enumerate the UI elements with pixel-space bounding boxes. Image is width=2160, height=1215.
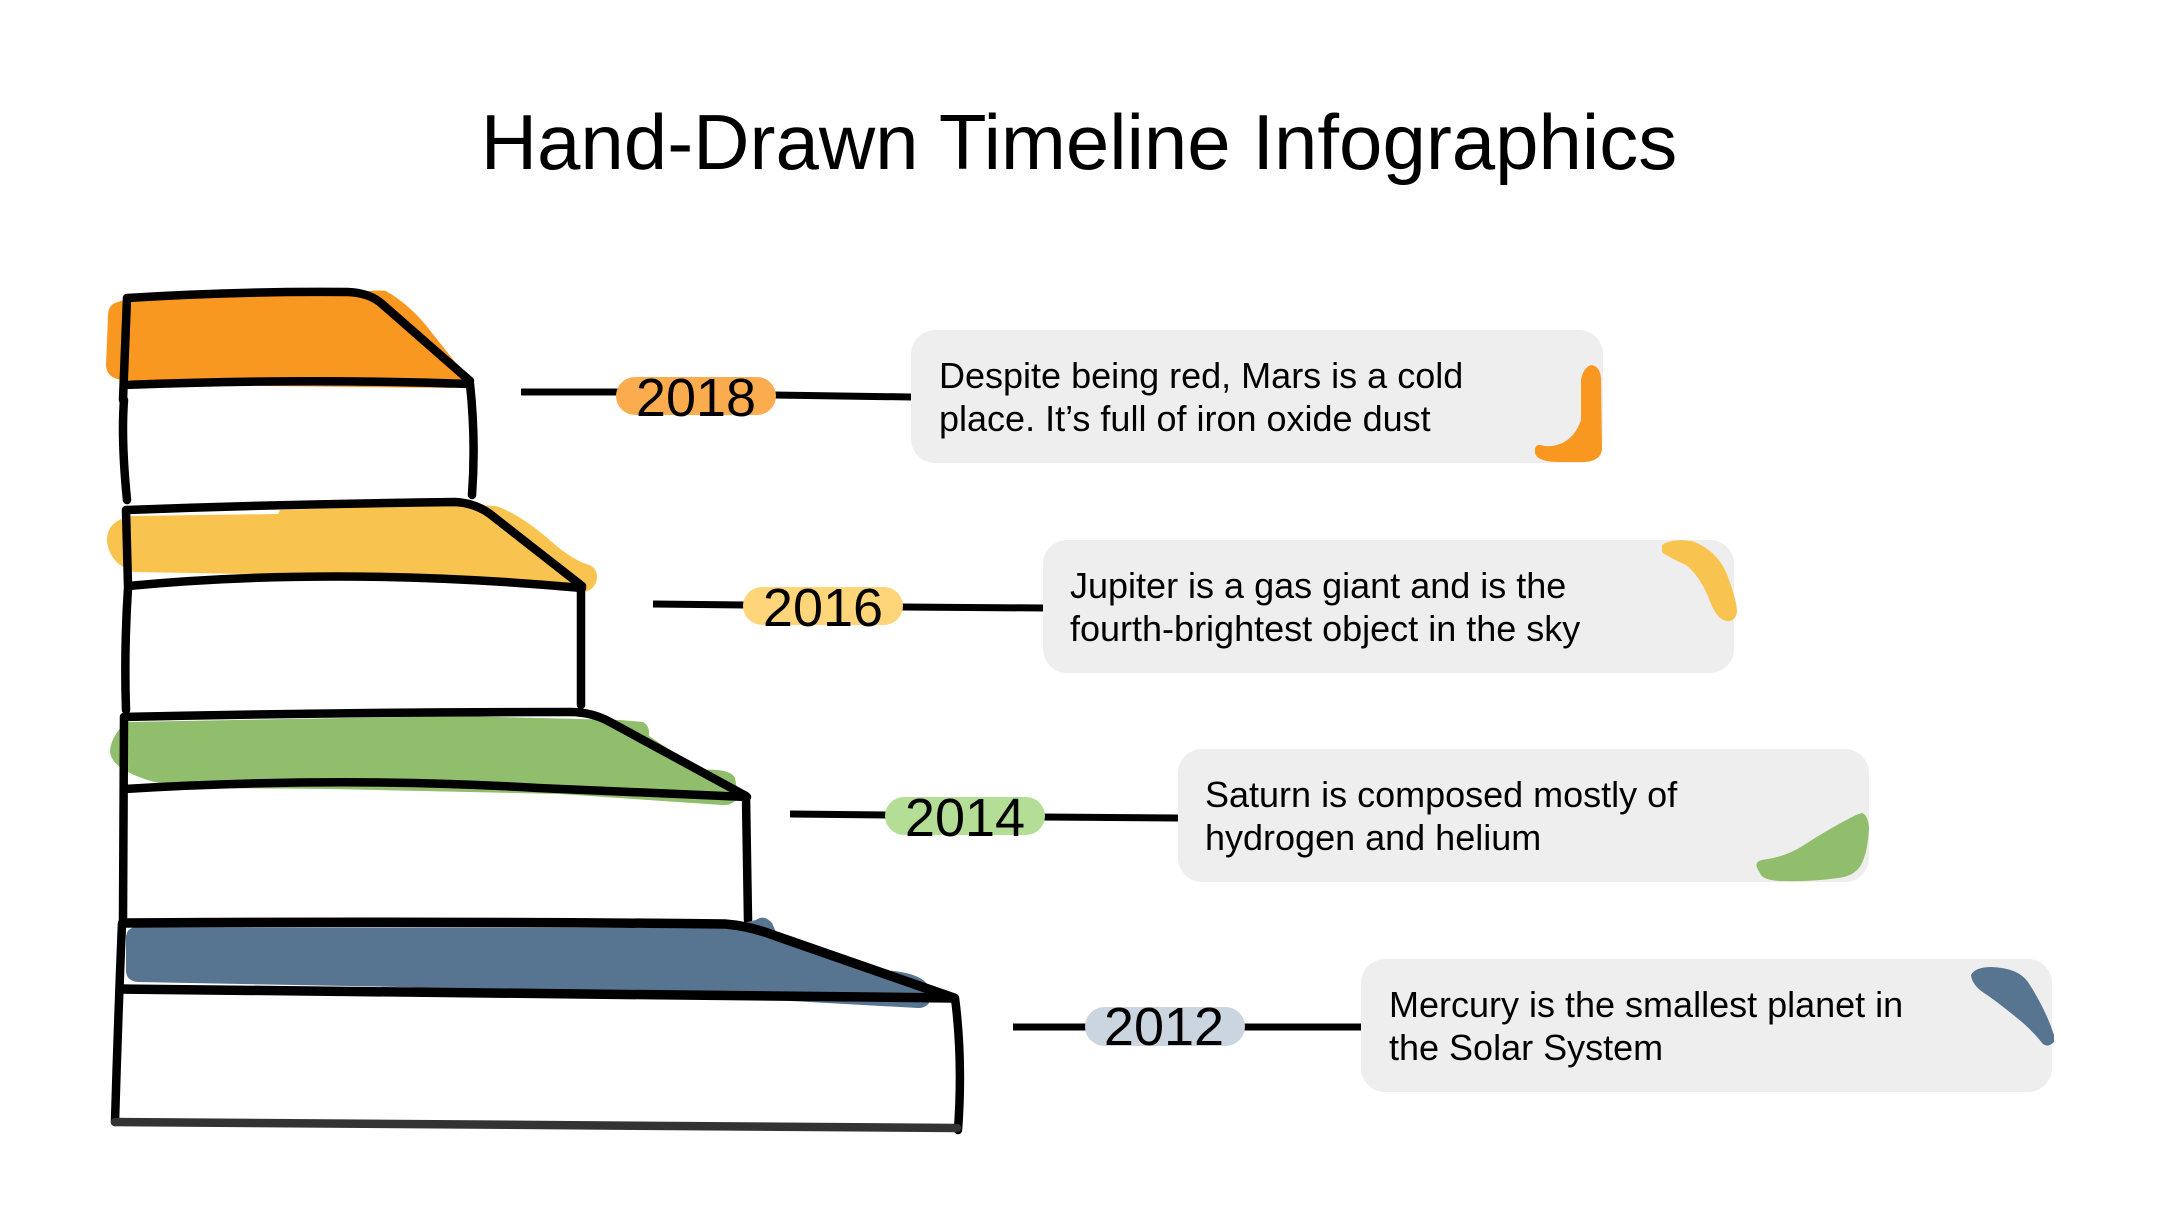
connector right (1243, 1024, 1361, 1030)
card text: Jupiter: Jupiter is a gas giant and is the (1070, 565, 1566, 606)
colour fill: 2016 yellow (107, 504, 597, 592)
year pill 2018 (616, 377, 776, 415)
connector left (521, 388, 618, 396)
card: Mercury (1361, 959, 2052, 1092)
outline: 2016 step (125, 502, 582, 710)
staircase: 2012 step (115, 918, 960, 1130)
colour fill: 2012 blue (126, 918, 931, 1008)
card text: Mercury: Mercury is the smallest planet in (1389, 984, 1903, 1025)
year label 2018: 2018 (636, 368, 756, 428)
card text: Mercury: the Solar System (1389, 1027, 1663, 1068)
card accent: blue (1971, 967, 2054, 1046)
outline: 2012 step (121, 922, 954, 998)
base line (115, 1122, 957, 1128)
timeline row 2012 (1013, 959, 2054, 1092)
connector right (902, 607, 1043, 608)
card: Saturn (1178, 749, 1869, 882)
colour fill: 2014 green (110, 716, 738, 805)
card text: Jupiter: fourth-brightest object in the sky (1070, 608, 1580, 649)
card: Jupiter (1043, 540, 1734, 673)
connector left (653, 604, 745, 605)
year label 2016: 2016 (763, 578, 883, 638)
outline: 2018 step (123, 292, 474, 500)
year label 2012: 2012 (1104, 997, 1224, 1057)
year label 2014: 2014 (905, 788, 1025, 848)
card: Mars (911, 330, 1603, 463)
connector left (1013, 1024, 1087, 1030)
staircase: 2018 step (106, 290, 474, 500)
outline: 2014 step (123, 712, 748, 920)
card text: Saturn: Saturn is composed mostly of (1205, 774, 1678, 815)
card accent: yellow (1662, 540, 1737, 621)
staircase: 2016 step (107, 502, 597, 710)
timeline row 2016 (653, 540, 1737, 673)
year pill 2016 (743, 587, 903, 625)
year pill 2012 (1085, 1007, 1245, 1046)
card accent: orange (1535, 365, 1602, 462)
connector left (790, 814, 887, 815)
card accent: green (1756, 813, 1869, 881)
connector right (1043, 817, 1178, 818)
staircase: 2014 step (110, 712, 748, 920)
card text: Mars: place. It’s full of iron oxide dust (939, 398, 1431, 439)
outline: 2012 walls (115, 923, 960, 1130)
timeline row 2014 (790, 749, 1869, 882)
colour fill: 2018 orange (106, 290, 463, 388)
card text: Saturn: hydrogen and helium (1205, 817, 1541, 858)
connector right (773, 395, 911, 397)
title: Hand-Drawn Timeline Infographics (481, 98, 1677, 186)
card text: Mars: Despite being red, Mars is a cold (939, 355, 1463, 396)
timeline row 2018 (521, 330, 1603, 463)
year pill 2014 (885, 797, 1045, 835)
